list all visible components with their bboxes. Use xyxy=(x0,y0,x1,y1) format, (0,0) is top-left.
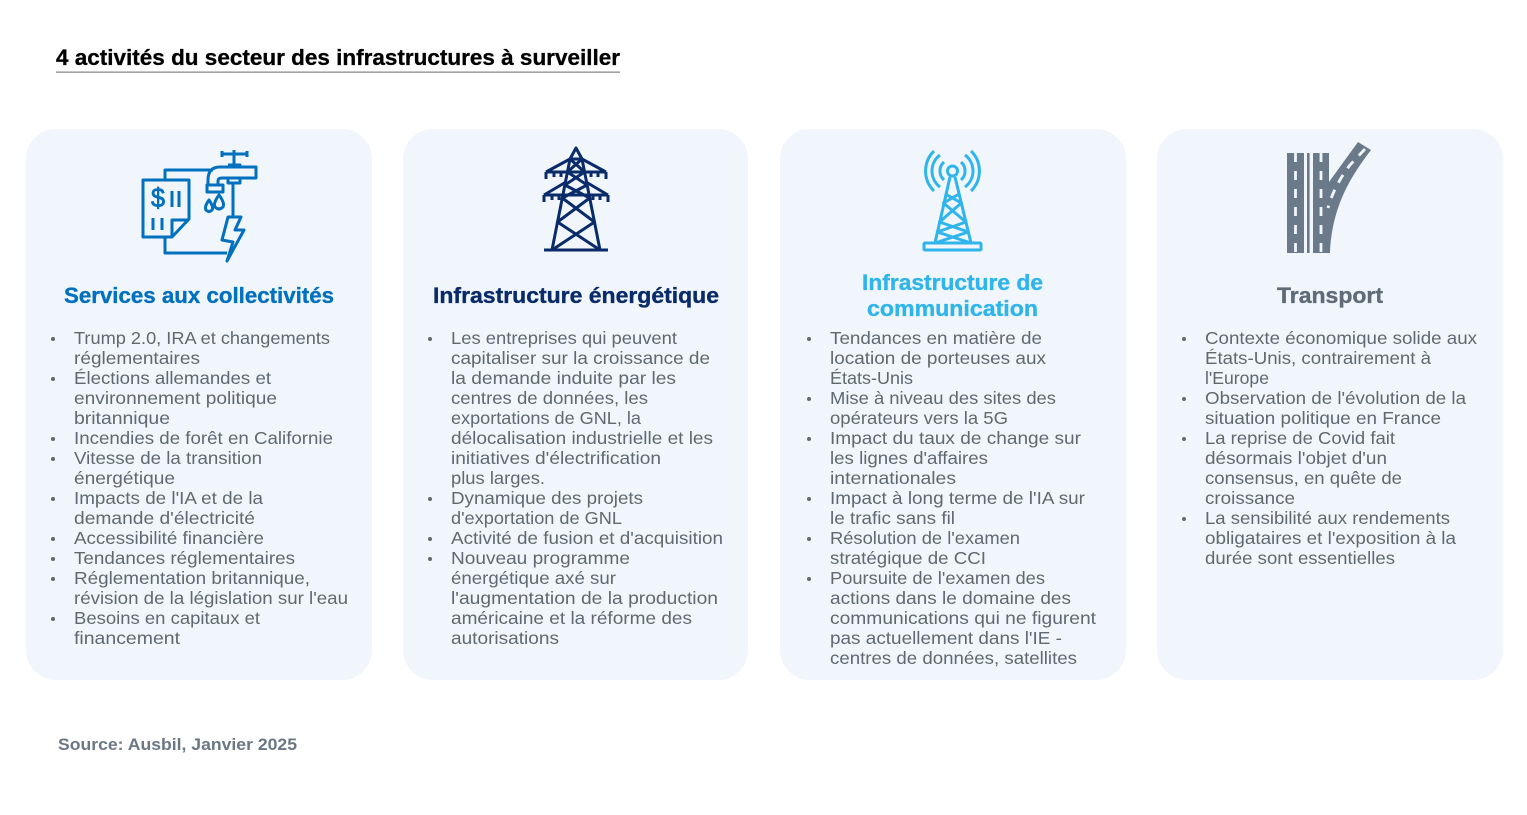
list: services aux collectivités: financement xyxy=(74,628,180,648)
list: infrastructure énergétique: Dynamique des projets xyxy=(451,488,643,508)
list: infrastructure énergétique: d'exportation de GNL xyxy=(451,508,622,528)
list: services aux collectivités: révision de la législation sur l'eau xyxy=(74,588,348,608)
list: infrastructure énergétique: plus larges. xyxy=(451,468,545,488)
list: infrastructure de communication: actions dans le domaine des xyxy=(830,588,1071,608)
list: infrastructure de communication: États-Unis xyxy=(830,368,913,388)
list: infrastructure énergétique: énergétique axé sur xyxy=(451,568,616,588)
list: services aux collectivités: britannique xyxy=(74,408,170,428)
list: infrastructure de communication: les lignes d'affaires xyxy=(830,448,988,468)
list: services aux collectivités: Tendances réglementaires xyxy=(74,548,295,568)
list: infrastructure de communication: stratégique de CCI xyxy=(830,548,986,568)
list: infrastructure de communication: opérateurs vers la 5G xyxy=(830,408,1008,428)
icon: communication tower xyxy=(924,151,981,250)
heading: transport: Transport xyxy=(1277,283,1384,308)
list: transport: États-Unis, contrairement à xyxy=(1205,348,1431,368)
list: services aux collectivités: énergétique xyxy=(74,468,175,488)
list: transport: La sensibilité aux rendements xyxy=(1205,508,1450,528)
list: infrastructure de communication: internationales xyxy=(830,468,956,488)
list: transport: désormais l'objet d'un xyxy=(1205,448,1387,468)
panel: infrastructure énergétique xyxy=(403,129,748,680)
source note: Source: Ausbil, Janvier 2025 xyxy=(58,735,297,754)
list: infrastructure énergétique: Activité de fusion et d'acquisition xyxy=(451,528,723,548)
list: infrastructure de communication: Impact du taux de change sur xyxy=(830,428,1081,448)
list: services aux collectivités xyxy=(51,328,348,648)
list: infrastructure de communication: location de porteuses aux xyxy=(830,348,1046,368)
list: infrastructure énergétique: centres de données, les xyxy=(451,388,648,408)
list: transport: consensus, en quête de xyxy=(1205,468,1402,488)
list: transport: obligataires et l'exposition à la xyxy=(1205,528,1456,548)
list: services aux collectivités: réglementaires xyxy=(74,348,200,368)
heading: infrastructure de communication: Infrastructure de xyxy=(862,270,1043,295)
list: services aux collectivités: Trump 2.0, IRA et changements xyxy=(74,328,330,348)
list: transport: Contexte économique solide aux xyxy=(1205,328,1477,348)
list: infrastructure énergétique: initiatives d'électrification xyxy=(451,448,661,468)
icon: bill, faucet and lightning: $ xyxy=(151,183,165,213)
panel: infrastructure de communication xyxy=(780,129,1126,680)
list: transport: situation politique en France xyxy=(1205,408,1441,428)
list: infrastructure de communication: Mise à niveau des sites des xyxy=(830,388,1056,408)
heading: infrastructure de communication xyxy=(862,270,1043,321)
list: infrastructure énergétique: capitaliser sur la croissance de xyxy=(451,348,710,368)
panel: transport xyxy=(1157,129,1503,680)
list: transport: durée sont essentielles xyxy=(1205,548,1395,568)
panel: services aux collectivités xyxy=(26,129,372,680)
list: transport xyxy=(1182,328,1477,568)
list: infrastructure de communication: Impact à long terme de l'IA sur xyxy=(830,488,1085,508)
list: infrastructure énergétique: Les entreprises qui peuvent xyxy=(451,328,677,348)
heading: infrastructure de communication: communication xyxy=(867,296,1038,321)
list: infrastructure énergétique: l'augmentation de la production xyxy=(451,588,718,608)
list: infrastructure énergétique: délocalisation industrielle et les xyxy=(451,428,713,448)
icon: road with branching lane xyxy=(1287,142,1371,253)
list: services aux collectivités: demande d'électricité xyxy=(74,508,255,528)
list: services aux collectivités: Réglementation britannique, xyxy=(74,568,310,588)
list: infrastructure de communication: pas actuellement dans l'IE - xyxy=(830,628,1062,648)
list: infrastructure énergétique: américaine et la réforme des xyxy=(451,608,692,628)
list: services aux collectivités: Besoins en capitaux et xyxy=(74,608,260,628)
list: infrastructure énergétique: la demande induite par les xyxy=(451,368,676,388)
list: infrastructure de communication: Poursuite de l'examen des xyxy=(830,568,1045,588)
list: infrastructure de communication: Tendances en matière de xyxy=(830,328,1042,348)
list: infrastructure de communication: centres de données, satellites xyxy=(830,648,1077,668)
list: infrastructure énergétique: Nouveau programme xyxy=(451,548,630,568)
list: transport: l'Europe xyxy=(1205,368,1269,388)
list: infrastructure de communication: communications qui ne figurent xyxy=(830,608,1096,628)
list: services aux collectivités: Accessibilité financière xyxy=(74,528,264,548)
list: infrastructure énergétique xyxy=(428,328,723,648)
heading: services aux collectivités: Services aux collectivités xyxy=(64,283,334,308)
icon: bill, faucet and lightning xyxy=(143,150,256,261)
list: infrastructure de communication: le trafic sans fil xyxy=(830,508,955,528)
list: services aux collectivités: environnement politique xyxy=(74,388,277,408)
list: transport: croissance xyxy=(1205,488,1295,508)
list: transport: Observation de l'évolution de la xyxy=(1205,388,1466,408)
list: infrastructure énergétique: exportations de GNL, la xyxy=(451,408,641,428)
icon: power pylon xyxy=(544,148,608,250)
list: transport: La reprise de Covid fait xyxy=(1205,428,1395,448)
list: infrastructure de communication: Résolution de l'examen xyxy=(830,528,1020,548)
title: 4 activités du secteur des infrastructures à surveiller xyxy=(56,45,620,70)
list: services aux collectivités: Impacts de l'IA et de la xyxy=(74,488,263,508)
list: services aux collectivités: Élections allemandes et xyxy=(74,368,271,388)
list: services aux collectivités: Vitesse de la transition xyxy=(74,448,262,468)
list: infrastructure énergétique: autorisations xyxy=(451,628,559,648)
list: services aux collectivités: Incendies de forêt en Californie xyxy=(74,428,333,448)
list: infrastructure de communication xyxy=(807,328,1096,668)
heading: infrastructure énergétique: Infrastructure énergétique xyxy=(433,283,719,308)
